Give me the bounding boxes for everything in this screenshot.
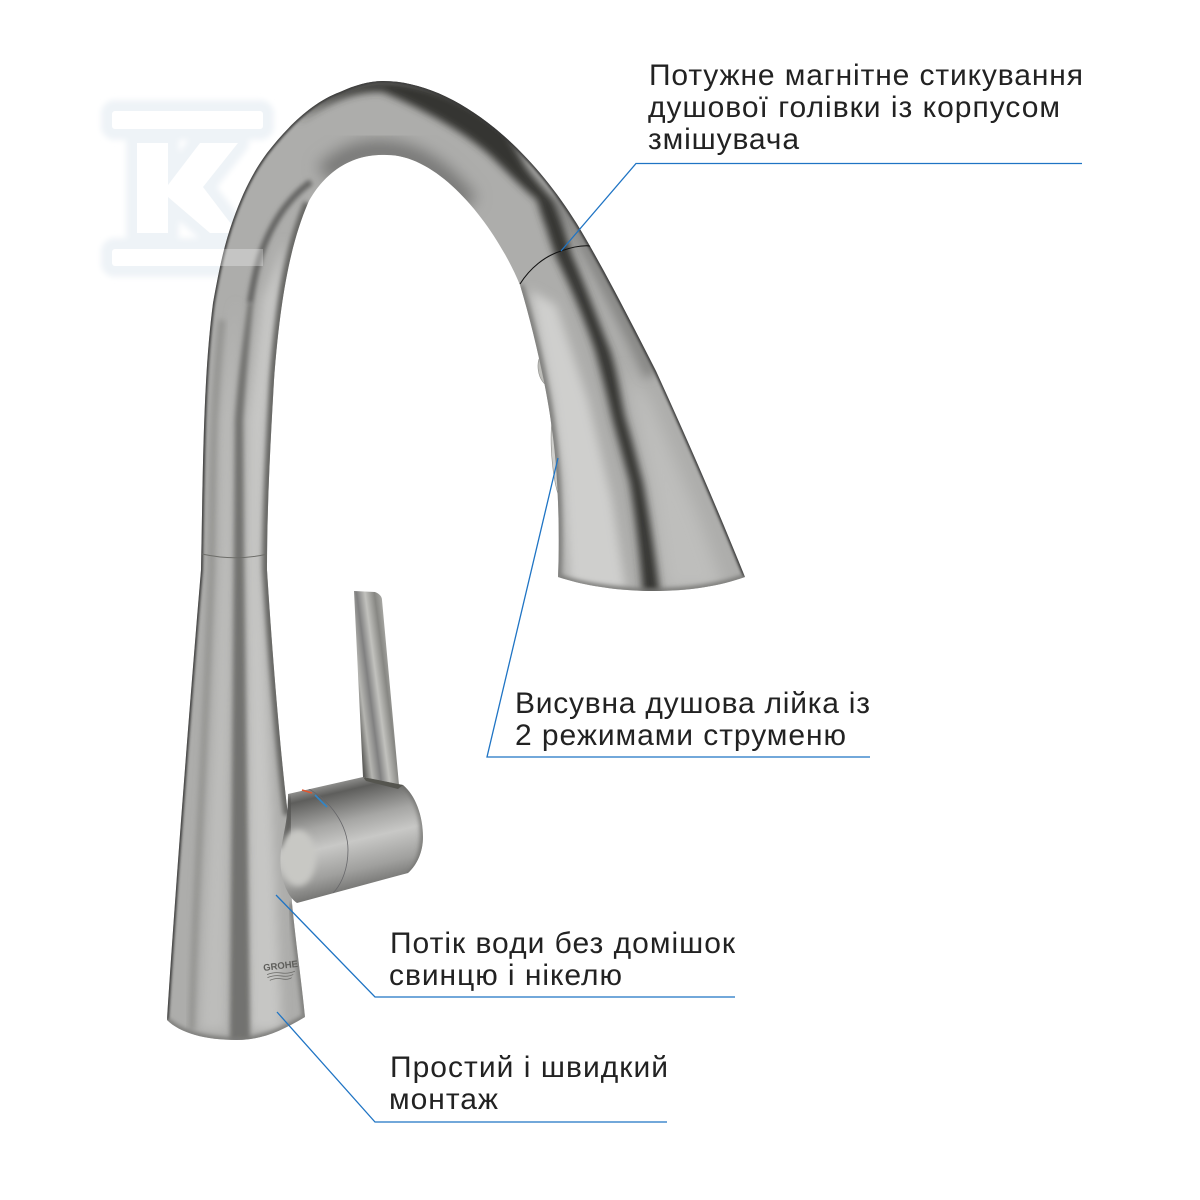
crease where stripe meets arch xyxy=(250,182,311,303)
inner edge shading of neck xyxy=(267,203,308,815)
callout: water flow: свинцю і нікелю xyxy=(389,959,622,992)
dark under-arch shading xyxy=(325,152,468,205)
outer grey strip of spout xyxy=(558,195,652,375)
logo: GROHE: GROHE xyxy=(263,959,299,974)
callout: easy installation: Простий і швидкий xyxy=(390,1051,668,1084)
light zone in column left of centre xyxy=(200,380,232,1030)
faucet body: column, arched neck and pull-out spout xyxy=(150,70,760,1050)
spout buttons xyxy=(538,355,561,502)
thin dark outline xyxy=(167,81,745,1020)
callout: magnetic docking: душової голівки із корпусом xyxy=(648,91,1060,124)
callout: magnetic docking: змішувача xyxy=(648,123,799,156)
dark band over arch running into spout xyxy=(298,81,660,595)
callout: easy installation xyxy=(277,1012,668,1122)
lever handle xyxy=(354,591,399,785)
hot and cold marks xyxy=(302,790,327,807)
mixer cylinder xyxy=(280,777,423,903)
callout: pull-out spray xyxy=(487,458,870,757)
callout: water flow: Потік води без домішок xyxy=(390,927,736,960)
soft darker zone beside outer column edge xyxy=(192,320,222,1030)
callout: magnetic docking: Потужне магнітне стикування xyxy=(649,59,1083,92)
light strip of spout, inner side xyxy=(530,290,626,590)
callout: easy installation: монтаж xyxy=(389,1083,498,1116)
logo: GROHE xyxy=(263,959,300,982)
inner edge shading of spout xyxy=(520,285,559,577)
light zone right of column centre xyxy=(246,240,285,1030)
central dark stripe of column xyxy=(230,303,253,1040)
base and nozzle bottom shade xyxy=(167,577,745,1040)
callout: pull-out spray: 2 режимами струменю xyxy=(515,719,846,752)
light strip of spout, outer side xyxy=(632,389,720,586)
callout: pull-out spray: Висувна душова лійка із xyxy=(515,687,870,720)
magnetic docking seam xyxy=(520,246,591,284)
watermark bar over neck xyxy=(205,249,263,266)
neck seam xyxy=(202,554,268,558)
watermark: K logo xyxy=(112,111,263,266)
callout: water flow xyxy=(276,895,736,997)
callout: magnetic docking xyxy=(561,59,1083,251)
lower column right edge xyxy=(292,903,305,1017)
